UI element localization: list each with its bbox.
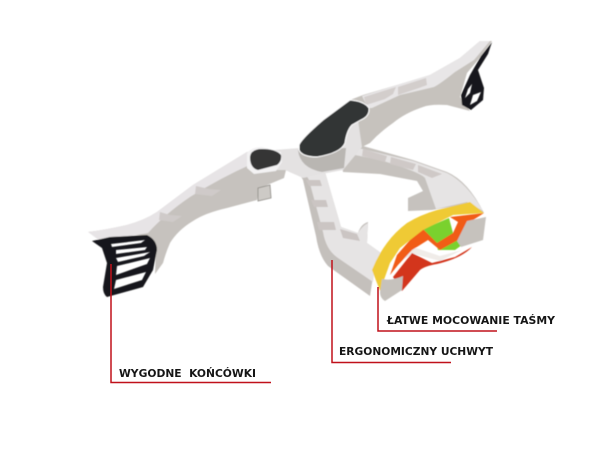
green ball	[423, 218, 462, 250]
upper right branch of handle	[340, 146, 484, 213]
callout: easy band mounting	[378, 287, 556, 331]
left arm of handle	[88, 150, 286, 274]
central hub	[247, 120, 362, 178]
white inner lining	[398, 247, 462, 262]
label: ERGONOMICZNY UCHWYT	[339, 345, 493, 358]
leader line	[111, 264, 271, 382]
band clip: lower end cap	[380, 276, 403, 301]
band clip: upper end cap	[457, 217, 486, 247]
black claw: right end	[461, 42, 492, 110]
leader line	[332, 260, 451, 362]
callout: end grips	[111, 264, 271, 382]
callout: ergonomic handle	[332, 260, 493, 362]
black claw: left end	[92, 235, 157, 297]
product photo: exerciser handle	[88, 41, 492, 301]
red band	[393, 247, 472, 291]
black pad: large thumb rest	[299, 100, 369, 157]
lower arm of handle	[278, 156, 381, 296]
leader line	[378, 287, 497, 331]
black pad: small round grip	[250, 149, 281, 170]
label: ŁATWE MOCOWANIE TAŚMY	[386, 314, 556, 327]
resistance bands	[372, 202, 484, 291]
right arm of handle	[350, 41, 492, 147]
yellow band	[372, 202, 484, 291]
label: WYGODNE KOŃCÓWKI	[119, 367, 256, 380]
orange band	[390, 213, 484, 275]
